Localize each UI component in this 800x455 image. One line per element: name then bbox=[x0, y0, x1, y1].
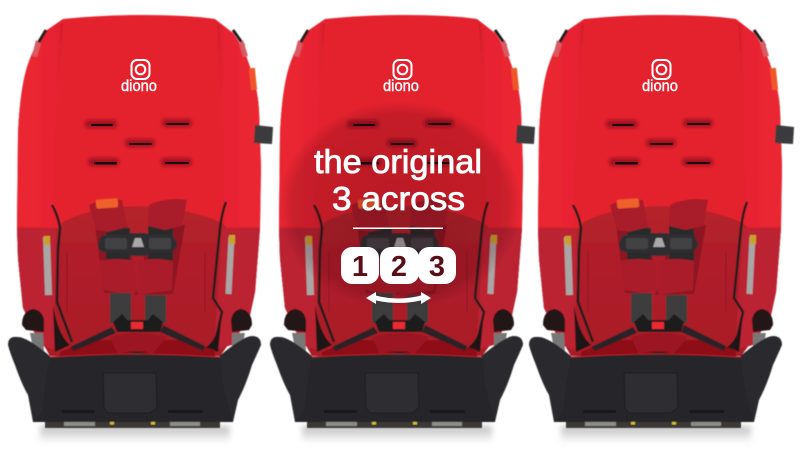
headline bbox=[314, 143, 482, 217]
seat illustration bbox=[270, 15, 535, 443]
headline line 2: 3 across bbox=[332, 180, 465, 217]
seat illustration bbox=[529, 15, 794, 443]
dark overlay behind message bbox=[278, 101, 522, 309]
badge 3: 3 bbox=[429, 251, 445, 283]
numbered badges bbox=[341, 247, 456, 284]
brand name: diono bbox=[383, 78, 419, 95]
brand name: diono bbox=[121, 78, 157, 95]
badge 2: 2 bbox=[391, 251, 407, 283]
brand name: diono bbox=[642, 78, 678, 95]
badge 1: 1 bbox=[352, 251, 368, 283]
seat illustration bbox=[8, 15, 273, 443]
headline line 1: the original bbox=[314, 143, 482, 180]
divider line bbox=[353, 228, 443, 229]
double-headed curved arrow bbox=[366, 292, 431, 304]
